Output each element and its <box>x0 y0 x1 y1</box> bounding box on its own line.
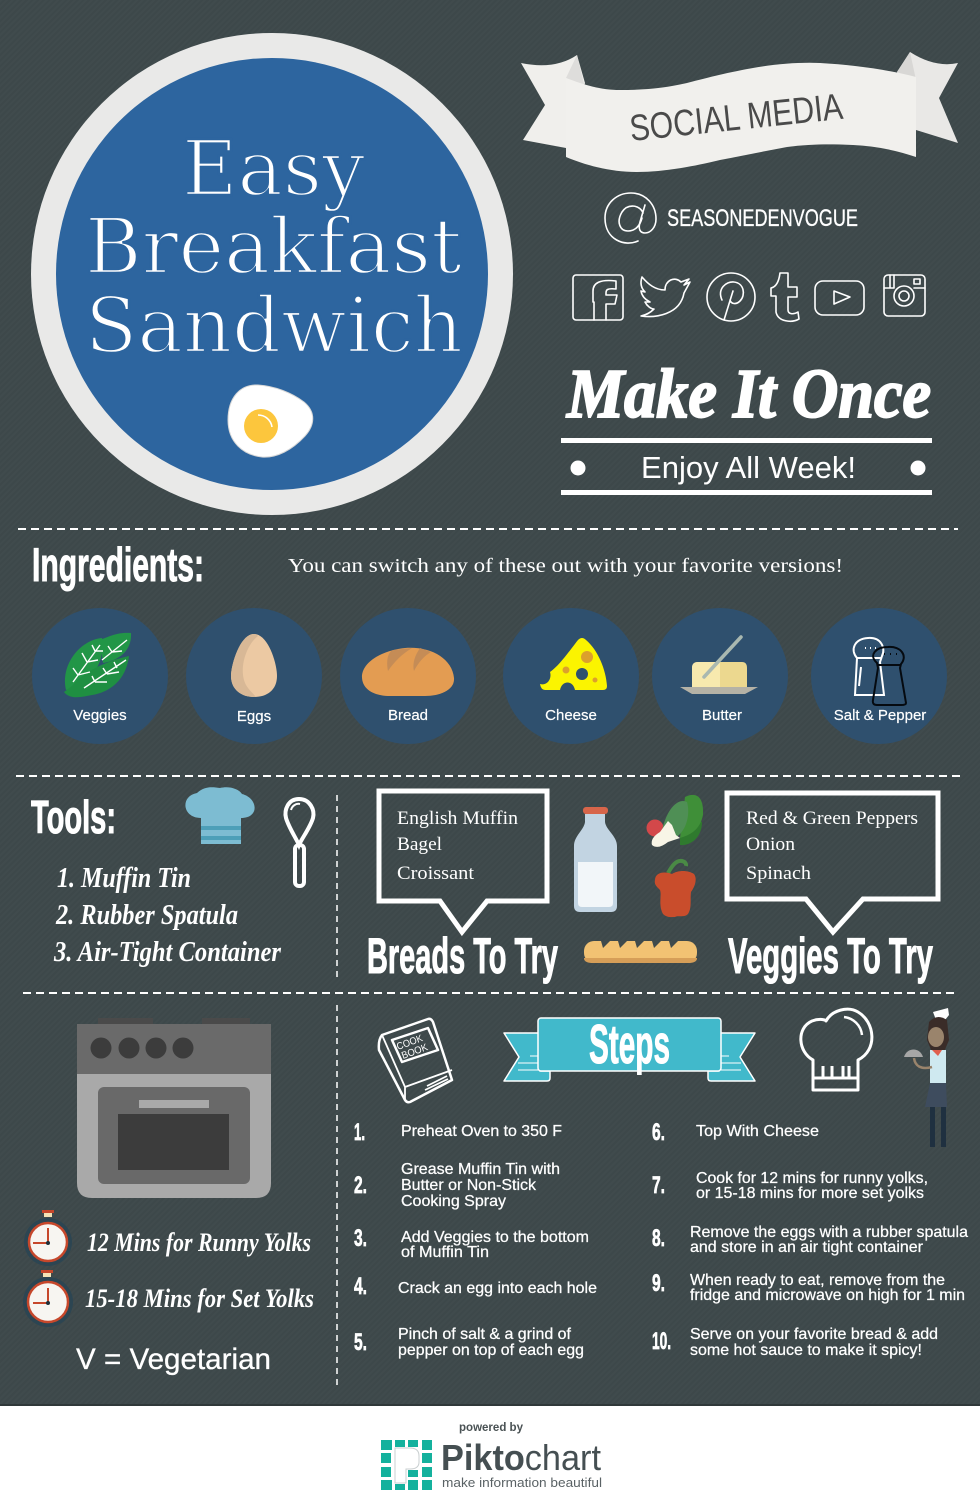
step 2: Cooking Spray <box>401 1193 506 1210</box>
at handle <box>605 193 858 243</box>
footer: make information beautiful <box>442 1475 602 1490</box>
step 9: fridge and microwave on high for 1 min <box>690 1287 965 1304</box>
15-18 mins label: 15-18 Mins for Set Yolks <box>85 1284 314 1313</box>
social media ribbon <box>521 52 958 172</box>
step 10 <box>652 1326 938 1359</box>
step 8: 8. <box>652 1225 665 1252</box>
icon: youtube <box>815 281 864 315</box>
speech bubble: breads: English Muffin <box>397 808 519 829</box>
icon: baguette <box>584 941 697 963</box>
speech bubble: breads: Croissant <box>397 863 475 884</box>
step 2: Butter or Non-Stick <box>401 1177 537 1194</box>
step 1: 1. <box>354 1119 365 1146</box>
icon: milk bottle <box>574 807 617 912</box>
icon: instagram <box>884 275 925 316</box>
footer <box>0 1406 980 1504</box>
icon: cookbook <box>379 1019 452 1102</box>
ingredient: eggs: Eggs <box>237 708 271 725</box>
12 mins label: 12 Mins for Runny Yolks <box>87 1228 311 1257</box>
step 3: Add Veggies to the bottom <box>401 1229 589 1246</box>
step 5: 5. <box>354 1329 367 1356</box>
icon: pinterest <box>707 273 755 321</box>
speech bubble: veggies <box>727 793 938 932</box>
step 1: Preheat Oven to 350 F <box>401 1123 562 1140</box>
step 6: Top With Cheese <box>696 1123 819 1140</box>
step 2: 2. <box>354 1172 367 1199</box>
steps banner: Steps <box>589 1013 670 1075</box>
step 5: Pinch of salt & a grind of <box>398 1326 572 1343</box>
icon: vegetables <box>646 795 703 847</box>
breads heading: Breads To Try <box>367 928 558 984</box>
icon: timer 12 mins <box>24 1210 72 1266</box>
make it once <box>561 356 932 495</box>
step 6: 6. <box>652 1119 665 1146</box>
icon: chef hat <box>185 787 255 844</box>
social icons <box>573 273 925 321</box>
footer: powered by <box>459 1420 523 1434</box>
speech bubble: breads: Bagel <box>397 834 442 855</box>
icon: fried egg <box>228 385 313 457</box>
ingredient: butter: Butter <box>702 707 742 724</box>
ingredient: cheese <box>503 608 639 744</box>
ingredient: veggies: Veggies <box>73 707 127 724</box>
at handle: SEASONEDENVOGUE <box>667 205 858 232</box>
tools list: 3. Air-Tight Container <box>53 937 282 968</box>
step 10: Serve on your favorite bread & add <box>690 1326 938 1343</box>
ingredient: veggies <box>32 608 168 744</box>
title <box>85 125 463 371</box>
tools list <box>53 863 282 968</box>
ingredient: butter <box>652 608 788 744</box>
make it once: Enjoy All Week! <box>641 450 856 485</box>
step 3: of Muffin Tin <box>401 1244 489 1261</box>
speech bubble: veggies: Spinach <box>746 863 812 884</box>
step 5 <box>354 1326 584 1359</box>
ingredient: eggs <box>186 608 322 744</box>
icon: cookbook: COOK <box>395 1033 425 1053</box>
vegetarian key: V = Vegetarian <box>76 1343 271 1376</box>
step 4 <box>354 1273 597 1300</box>
step 3: 3. <box>354 1225 367 1252</box>
step 7: or 15-18 mins for more set yolks <box>696 1185 924 1202</box>
icon: facebook <box>573 275 623 320</box>
social media ribbon: SOCIAL MEDIA <box>628 86 845 149</box>
step 3 <box>354 1225 589 1261</box>
ingredients note: You can switch any of these out with your favorite versions! <box>288 555 843 577</box>
icon: chef figure <box>904 1008 949 1147</box>
step 7: 7. <box>652 1172 665 1199</box>
ingredient: cheese: Cheese <box>545 707 597 724</box>
steps list <box>354 1119 968 1359</box>
step 9: When ready to eat, remove from the <box>690 1272 945 1289</box>
step 8: and store in an air tight container <box>690 1239 924 1256</box>
step 2: Grease Muffin Tin with <box>401 1161 560 1178</box>
ingredient: bread: Bread <box>388 707 428 724</box>
step 1 <box>354 1119 562 1146</box>
icon: tumblr <box>771 273 799 321</box>
step 10: some hot sauce to make it spicy! <box>690 1342 922 1359</box>
step 7: Cook for 12 mins for runny yolks, <box>696 1170 928 1187</box>
title: Breakfast <box>85 203 462 292</box>
icon: timer 15-18 mins <box>23 1270 73 1327</box>
step 10: 10. <box>652 1328 671 1355</box>
ingredient: bread <box>340 608 476 744</box>
step 4: Crack an egg into each hole <box>398 1280 597 1297</box>
piktochart logo mark <box>381 1440 432 1490</box>
step 9: 9. <box>652 1270 665 1297</box>
icon: oven <box>77 1018 271 1198</box>
step 9 <box>652 1270 965 1304</box>
piktochart wordmark: Piktochart <box>441 1437 601 1478</box>
step 8: Remove the eggs with a rubber spatula <box>690 1224 968 1241</box>
step 8 <box>652 1224 968 1256</box>
icon: twitter <box>641 277 690 317</box>
ingredient: salt and pepper: Salt & Pepper <box>834 707 926 724</box>
step 4: 4. <box>354 1273 367 1300</box>
title: Sandwich <box>85 282 463 371</box>
step 6 <box>652 1119 819 1146</box>
ingredients heading: Ingredients: <box>32 538 204 591</box>
title: Easy <box>182 125 365 214</box>
steps banner <box>504 1013 755 1081</box>
title badge <box>31 33 513 515</box>
tools heading: Tools: <box>31 791 116 843</box>
icon: spatula <box>286 799 313 886</box>
speech bubble: breads <box>379 791 547 932</box>
speech bubble: veggies: Red & Green Peppers <box>746 808 918 829</box>
icon: red pepper <box>655 861 696 917</box>
ingredient: salt and pepper <box>811 608 947 744</box>
icon: cookbook: BOOK <box>400 1042 430 1062</box>
step 2 <box>354 1161 560 1210</box>
step 5: pepper on top of each egg <box>398 1342 584 1359</box>
icon: chef hat outline <box>801 1009 872 1090</box>
tools list: 2. Rubber Spatula <box>55 900 238 931</box>
tools list: 1. Muffin Tin <box>57 863 191 894</box>
icon: at sign <box>605 193 656 243</box>
make it once: Make It Once <box>566 356 931 433</box>
step 7 <box>652 1170 928 1202</box>
speech bubble: veggies: Onion <box>746 834 796 855</box>
